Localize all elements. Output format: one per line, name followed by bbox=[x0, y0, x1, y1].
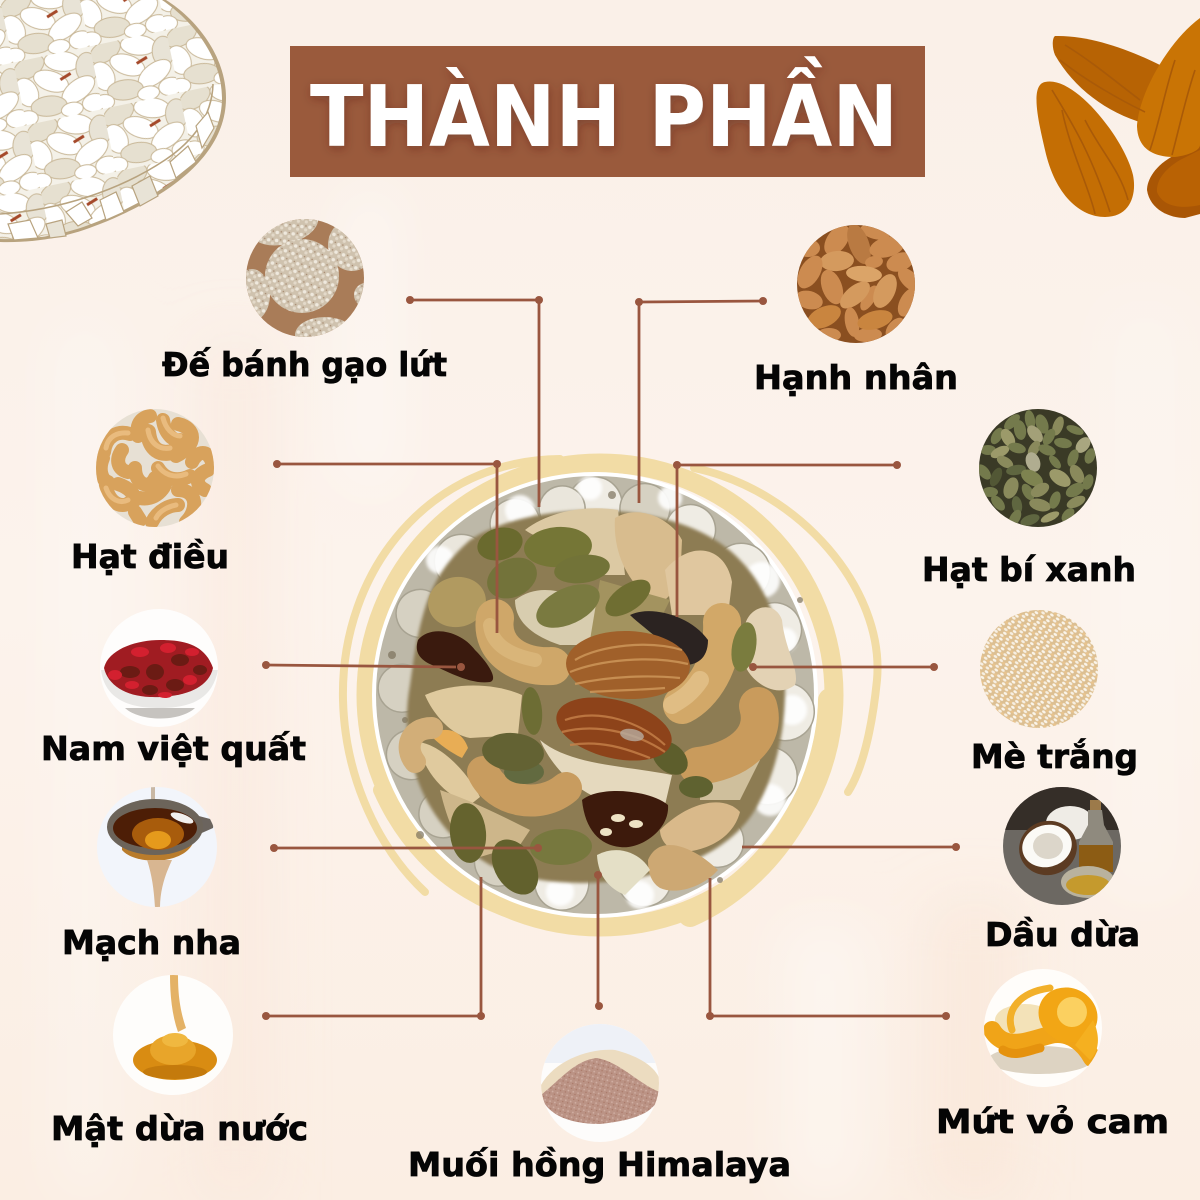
icon: malt syrup spoon bbox=[96, 786, 218, 908]
label: Mè trắng bbox=[971, 737, 1138, 776]
icon: coconut nectar drip bbox=[113, 975, 233, 1095]
label: Hạt điều bbox=[71, 537, 229, 576]
ingredient: white sesame bbox=[971, 609, 1138, 776]
ingredient: malt syrup bbox=[62, 786, 241, 962]
icon: almonds photo bbox=[797, 225, 915, 343]
label: Mạch nha bbox=[62, 923, 241, 962]
brush ring bbox=[343, 459, 878, 927]
peanut bbox=[424, 572, 490, 632]
label: Nam việt quất bbox=[41, 729, 306, 768]
ingredient: coconut nectar bbox=[51, 975, 308, 1148]
raisins bbox=[417, 611, 708, 847]
coconut flakes bbox=[418, 508, 796, 895]
icon: pink salt mound bbox=[540, 1023, 660, 1143]
icon: rice cakes photo bbox=[246, 219, 364, 337]
cashews bbox=[410, 618, 760, 801]
ingredient: almonds bbox=[754, 220, 958, 397]
ingredient: candied orange peel bbox=[936, 969, 1169, 1141]
illustration: rice cake top-left bbox=[0, 0, 226, 242]
ingredient: pumpkin seeds bbox=[922, 408, 1136, 589]
title banner bbox=[290, 46, 925, 177]
label: Mật dừa nước bbox=[51, 1109, 308, 1148]
label: Đế bánh gạo lứt bbox=[162, 345, 447, 384]
ingredient: coconut oil bbox=[985, 786, 1140, 954]
label: Muối hồng Himalaya bbox=[408, 1145, 791, 1184]
icon: cashews photo bbox=[95, 408, 215, 528]
ingredient: cranberries bbox=[41, 608, 306, 768]
almonds on top bbox=[550, 629, 691, 771]
connector lines bbox=[262, 296, 960, 1020]
icon: coconut and oil photo bbox=[1002, 786, 1122, 906]
label: Hạnh nhân bbox=[754, 358, 958, 397]
icon: white sesame photo bbox=[979, 609, 1099, 729]
icon: dried cranberries in bowl bbox=[100, 608, 220, 728]
pumpkin seeds bbox=[447, 523, 760, 903]
label: Hạt bí xanh bbox=[922, 550, 1136, 589]
illustration: almonds top-right bbox=[1036, 18, 1200, 218]
puffed rice rim bbox=[377, 476, 817, 914]
ingredient: brown rice cake base bbox=[162, 219, 447, 384]
label: Mứt vỏ cam bbox=[936, 1102, 1169, 1141]
ingredient: cashews bbox=[71, 408, 229, 576]
rice cake with toppings bbox=[372, 472, 818, 918]
icon: pumpkin seeds photo bbox=[974, 408, 1098, 528]
toppings shadow base bbox=[407, 510, 785, 883]
title: THÀNH PHẦN bbox=[310, 56, 898, 167]
ingredient: Himalayan pink salt bbox=[408, 1023, 791, 1184]
label: Dầu dừa bbox=[985, 915, 1140, 954]
icon: orange peel curl bbox=[984, 969, 1107, 1089]
